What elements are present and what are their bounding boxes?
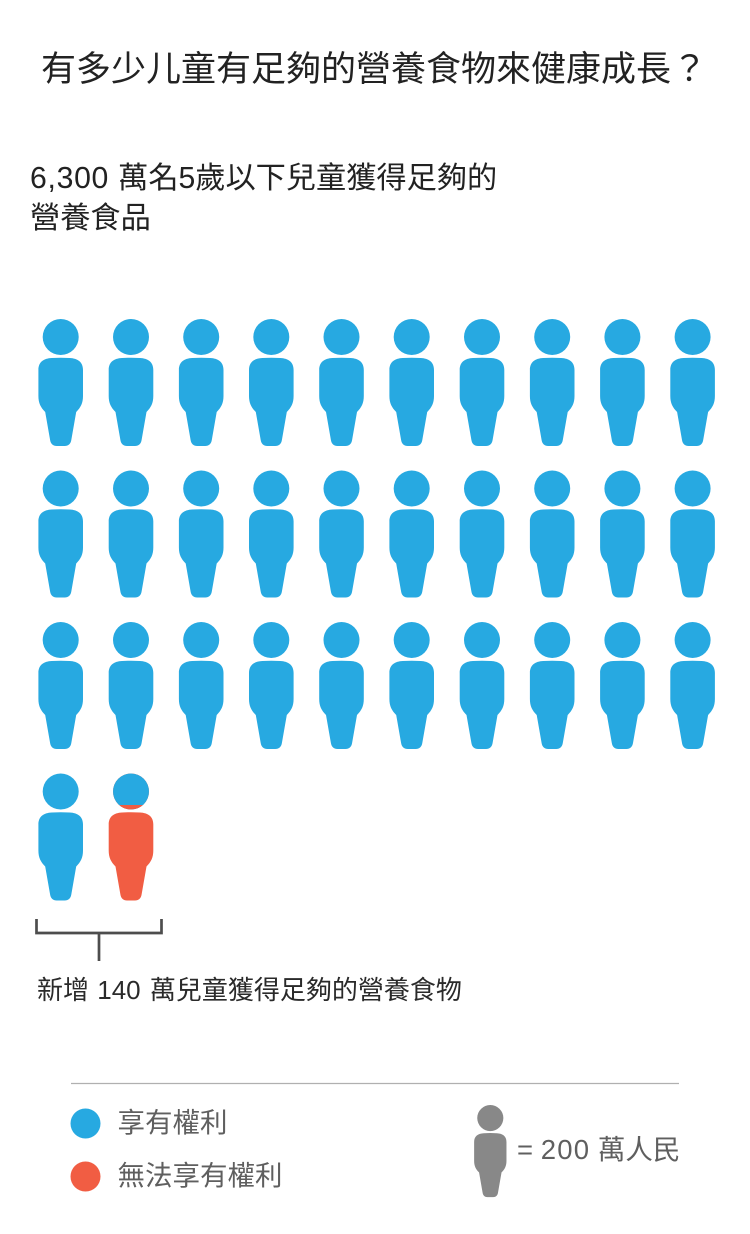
- title: 有多少儿童有足夠的營養食物來健康成長？: [41, 50, 707, 89]
- row 3 of people: [38, 622, 715, 749]
- row 2 of people: [38, 470, 715, 598]
- subheading: 6,300 萬名5歲以下兒童獲得足夠的: [30, 161, 497, 195]
- legend: unit label: = 200 萬人民: [517, 1134, 680, 1165]
- legend: has right: [70, 1107, 228, 1138]
- subheading: [30, 161, 497, 235]
- bracket: [36, 919, 162, 961]
- row 1 of people: [38, 319, 715, 446]
- legend: has right: 享有權利: [118, 1107, 228, 1138]
- caption: additional children: 新增 140 萬兒童獲得足夠的營養食物: [37, 975, 462, 1005]
- row 4: blue person: [38, 774, 83, 900]
- row 4: partial red person: [109, 774, 153, 900]
- legend: unit person icon: [474, 1105, 506, 1197]
- legend: no right: 無法享有權利: [118, 1160, 282, 1191]
- pictogram: people grid: [38, 319, 715, 900]
- subheading: 營養食品: [30, 201, 151, 235]
